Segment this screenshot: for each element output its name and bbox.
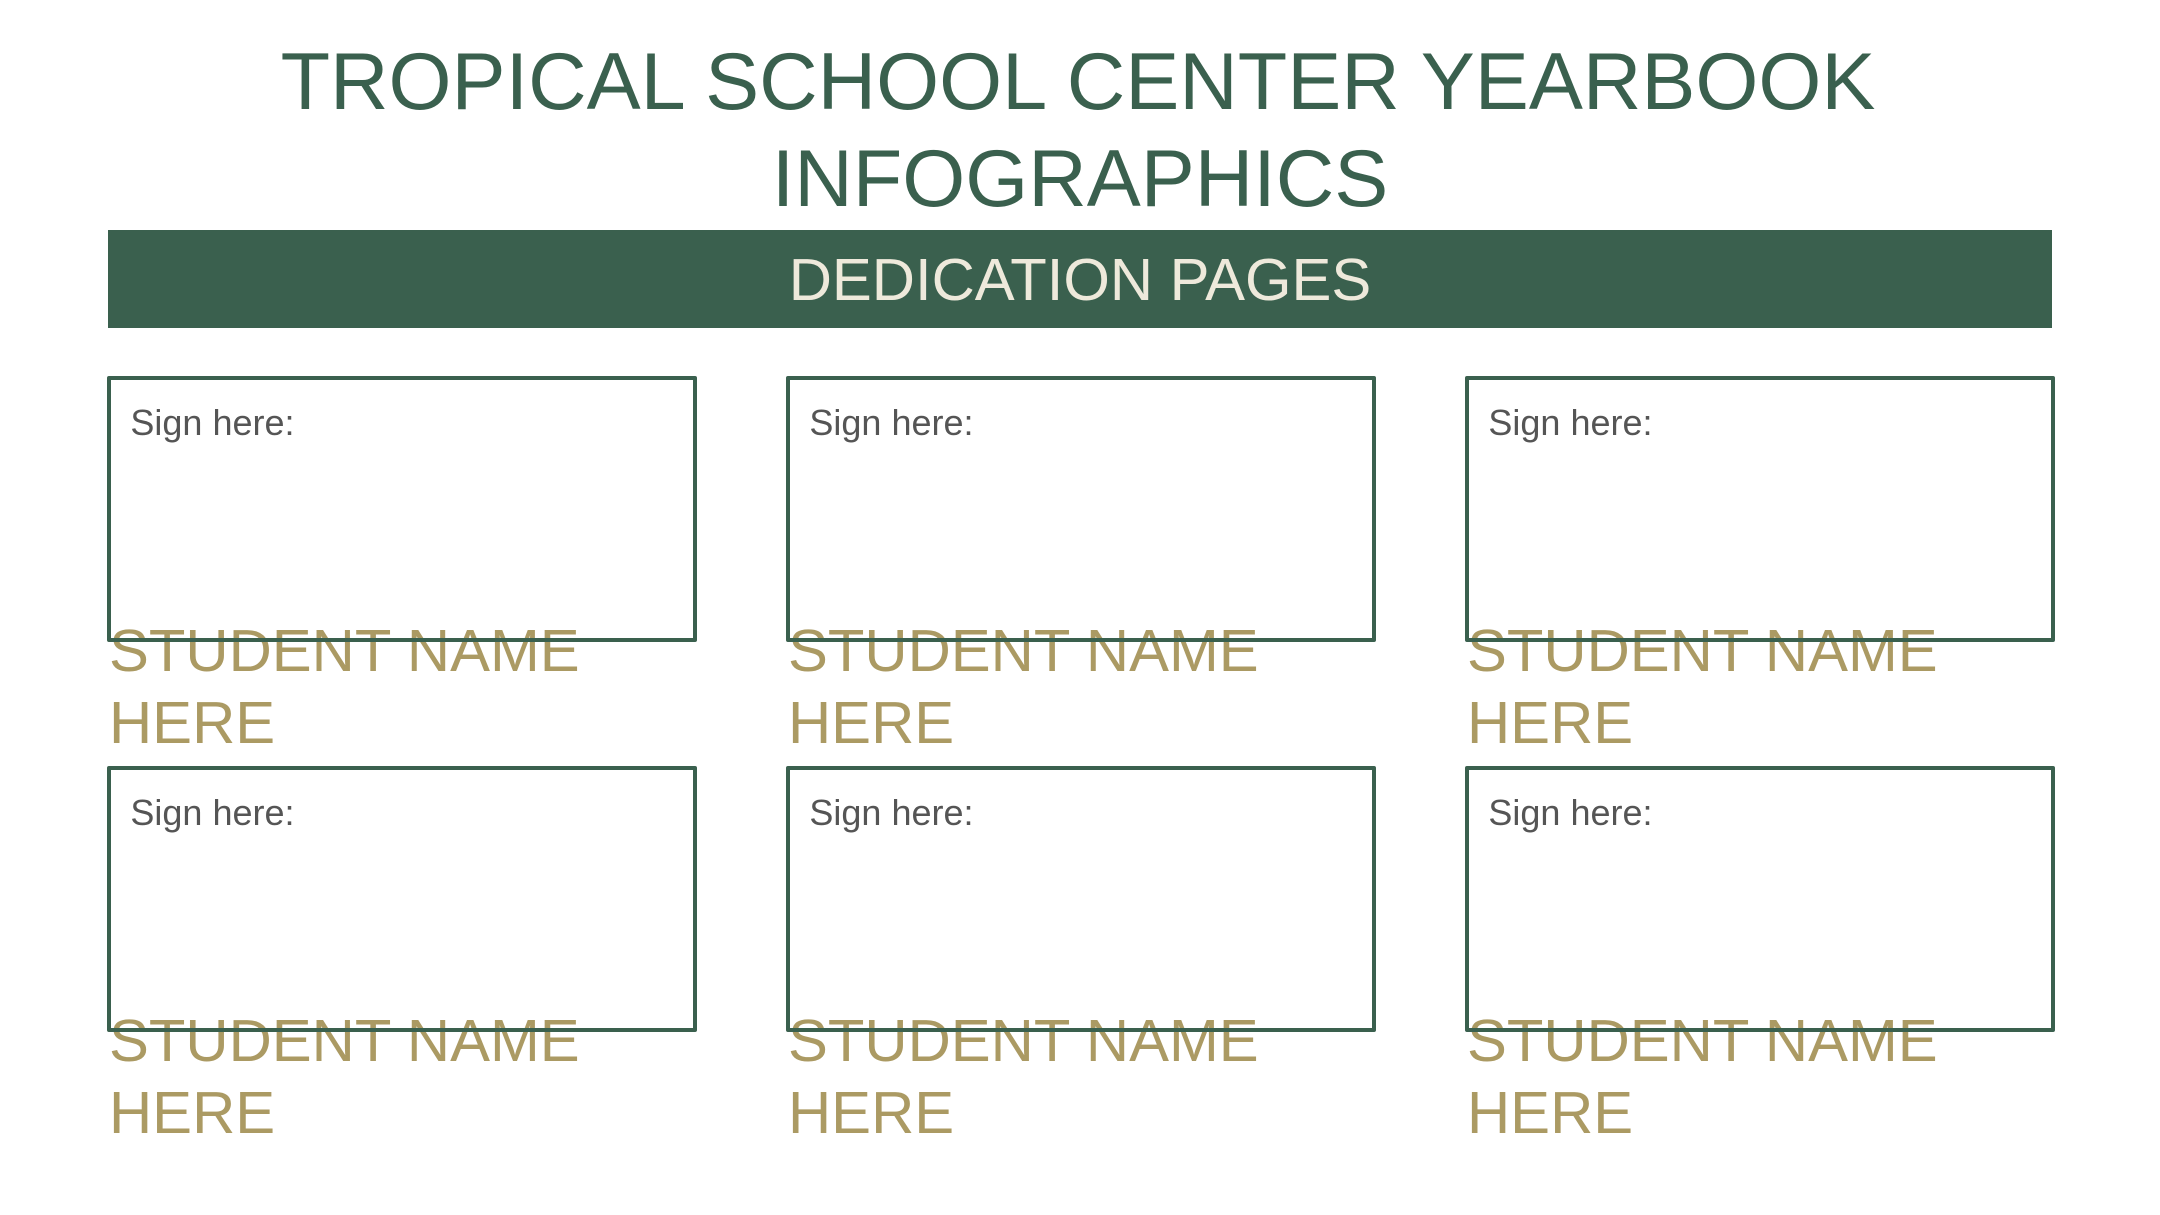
title: TROPICAL SCHOOL CENTER YEARBOOK xyxy=(281,37,1875,127)
student name: STUDENT NAME xyxy=(109,616,580,684)
panel: student card row 1 column 3 xyxy=(1465,376,2055,756)
student name: HERE xyxy=(109,688,275,756)
panel: student card row 2 column 1 xyxy=(107,766,697,1146)
signature box: Sign here: xyxy=(130,792,294,832)
signature box xyxy=(786,766,1376,1032)
signature box xyxy=(1465,376,2055,642)
signature box xyxy=(1465,766,2055,1032)
student name: HERE xyxy=(788,688,954,756)
section banner: dedication pages: DEDICATION PAGES xyxy=(789,246,1371,313)
signature box: Sign here: xyxy=(130,402,294,442)
section banner: dedication pages xyxy=(108,230,2052,328)
student name: HERE xyxy=(788,1078,954,1146)
signature box: Sign here: xyxy=(1488,402,1652,442)
student name: STUDENT NAME xyxy=(1467,1006,1938,1074)
student name: STUDENT NAME xyxy=(1467,616,1938,684)
signature box: Sign here: xyxy=(1488,792,1652,832)
signature box xyxy=(107,376,697,642)
panel: student card row 1 column 1 xyxy=(107,376,697,756)
panel: student card row 2 column 2 xyxy=(786,766,1376,1146)
panel: student card row 2 column 3 xyxy=(1465,766,2055,1146)
signature box: Sign here: xyxy=(809,792,974,832)
title xyxy=(281,37,1875,224)
student name xyxy=(109,1006,580,1146)
title: INFOGRAPHICS xyxy=(772,134,1388,224)
student name xyxy=(1467,1006,1938,1146)
student name xyxy=(788,1006,1259,1146)
signature box: Sign here: xyxy=(809,402,974,442)
student name xyxy=(1467,616,1938,756)
student name: STUDENT NAME xyxy=(788,616,1259,684)
panel: student card row 1 column 2 xyxy=(786,376,1376,756)
student name: HERE xyxy=(109,1078,275,1146)
student name xyxy=(109,616,580,756)
student name: STUDENT NAME xyxy=(788,1006,1259,1074)
signature box xyxy=(786,376,1376,642)
signature box xyxy=(107,766,697,1032)
student name: HERE xyxy=(1467,1078,1633,1146)
student name: STUDENT NAME xyxy=(109,1006,580,1074)
student name: HERE xyxy=(1467,688,1633,756)
student name xyxy=(788,616,1259,756)
